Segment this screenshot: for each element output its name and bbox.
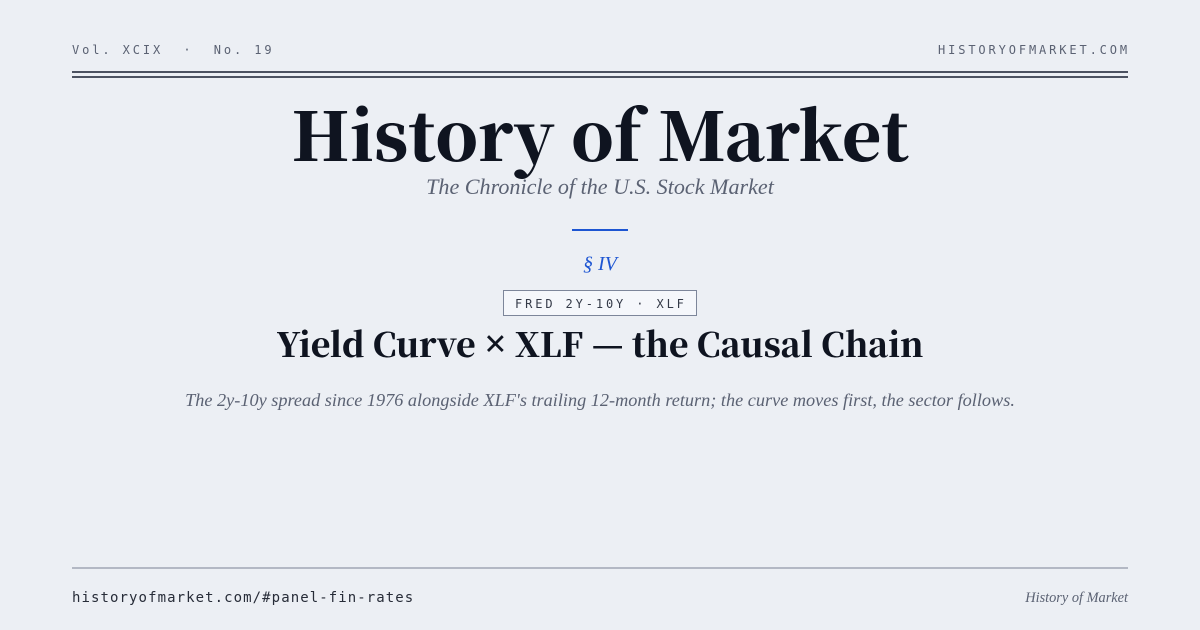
source badge [503, 290, 697, 316]
footer url: historyofmarket.com/#panel-fin-rates [72, 590, 414, 606]
masthead: site name: HISTORYOFMARKET.COM [938, 43, 1130, 57]
description: The 2y-10y spread since 1976 alongside XLF's trailing 12-month return; the curve moves first, the sector follows. [185, 390, 1015, 410]
accent rule [572, 229, 628, 231]
section number: § IV [583, 253, 617, 275]
source badge: FRED 2Y-10Y · XLF [515, 297, 687, 311]
subtitle: The Chronicle of the U.S. Stock Market [426, 174, 774, 199]
footer rule [72, 567, 1128, 569]
section heading: Yield Curve × XLF — the Causal Chain [277, 318, 923, 367]
title: History of Market [291, 85, 909, 181]
masthead double rule [72, 71, 1128, 78]
footer publication name: History of Market [1025, 590, 1128, 606]
masthead: volume and issue: Vol. XCIX · No. 19 [72, 43, 274, 57]
